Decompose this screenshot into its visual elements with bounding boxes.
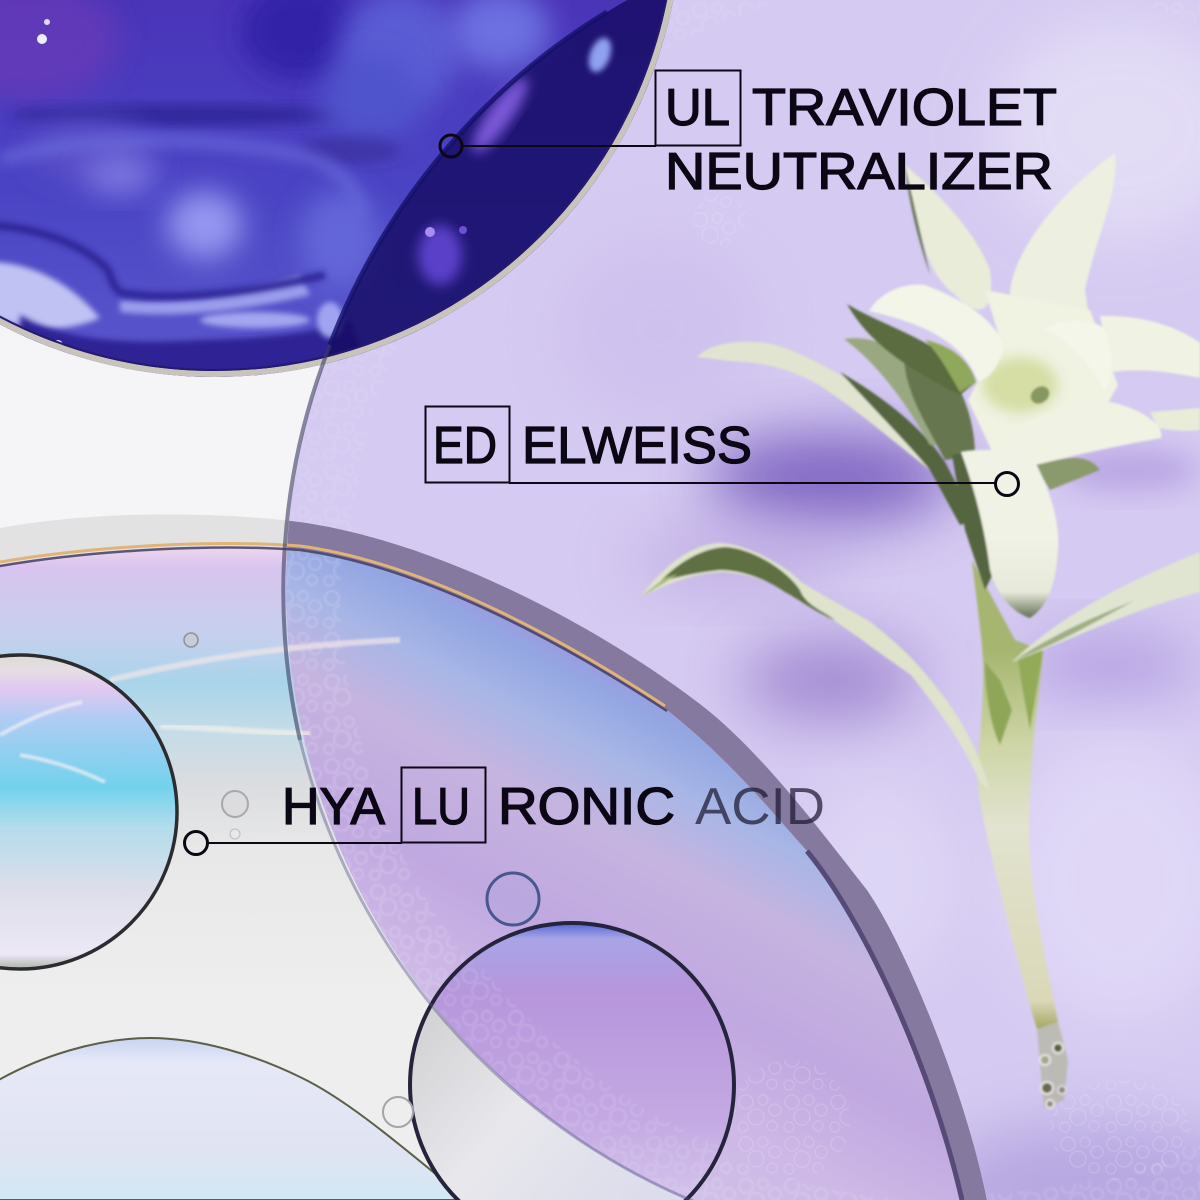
petal: lower right	[1000, 402, 1161, 490]
callout: ultraviolet neutralizer: NEUTRALIZER	[665, 143, 1053, 201]
icon: large lilac bubble bottom	[408, 921, 736, 1200]
callout: ultraviolet neutralizer: TRAVIOLET	[752, 79, 1057, 137]
panel: hyaluronic acid pool	[0, 514, 987, 1200]
petal: top left	[905, 165, 991, 310]
panel: ultraviolet blue circle	[0, 0, 674, 377]
callout: hyaluronic acid: ACID	[695, 778, 825, 836]
flower centre dark detail	[1027, 383, 1053, 407]
petal: top right	[1010, 153, 1116, 325]
callout: edelweiss: ELWEISS	[522, 417, 752, 475]
callout: edelweiss: ED	[433, 417, 497, 475]
callout: hyaluronic acid	[184, 768, 825, 854]
leaf: lower right	[1012, 552, 1200, 662]
icon: large iridescent bubble left	[0, 655, 177, 969]
icon: edelweiss flower	[640, 153, 1200, 1108]
bud	[904, 352, 975, 460]
flower centre green	[982, 357, 1058, 413]
callout: edelweiss	[426, 406, 1018, 496]
outer rim band	[0, 514, 987, 1200]
leaf: upper left	[697, 342, 975, 525]
callout: hyaluronic acid: HYA	[282, 778, 385, 836]
big circle edge	[283, 12, 700, 1200]
icon: small bubble above large bubble	[487, 873, 539, 925]
petal: far right	[1150, 408, 1200, 431]
flower centre	[968, 290, 1118, 458]
icon: small clear bubbles	[184, 633, 413, 1127]
callout: hyaluronic acid: LU	[412, 778, 470, 836]
leaf: thin upper	[844, 338, 965, 445]
petal: left with green underside	[847, 284, 1004, 395]
petal: long lower	[961, 450, 1058, 618]
callout: ultraviolet neutralizer: UL	[665, 79, 730, 137]
petal: right	[1100, 316, 1200, 378]
callout: ultraviolet neutralizer	[440, 70, 1057, 201]
leaf: lower left	[640, 543, 990, 790]
stem	[972, 560, 1058, 1029]
lower arc bubble	[0, 1038, 467, 1200]
panel: lilac foam circle	[286, 0, 1200, 1200]
stem tip bubbles	[1037, 1022, 1068, 1108]
callout: hyaluronic acid: RONIC	[498, 778, 675, 836]
petal: centre inner	[1044, 321, 1111, 392]
shade below lower petal	[952, 450, 995, 590]
